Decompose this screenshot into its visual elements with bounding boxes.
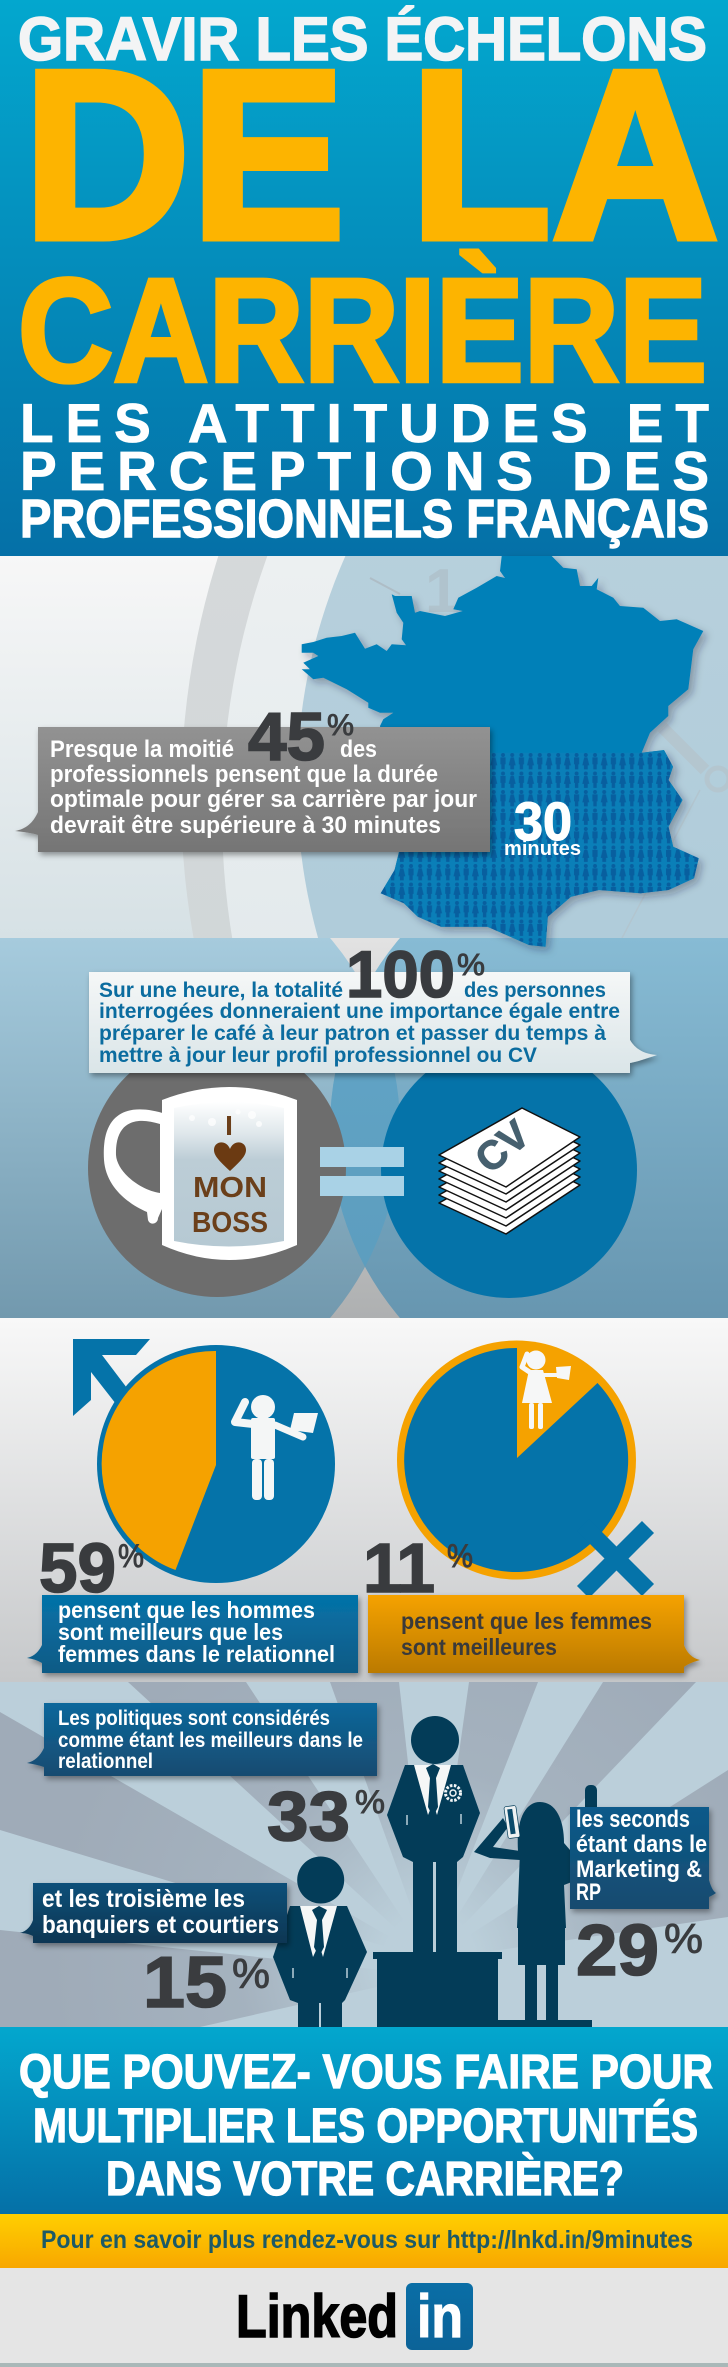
- mug text: boss: BOSS: [192, 1207, 268, 1239]
- logo: LinkedIn: Linked: [236, 2283, 398, 2350]
- number: 15 percent: %: [232, 1950, 270, 1997]
- callout: presque la moitié: [15, 699, 490, 852]
- number: 45 percent: 45: [248, 699, 325, 775]
- callout text: Presque la moitié: [50, 736, 234, 763]
- callout: marketing: étant dans le: [576, 1831, 707, 1858]
- callout: politiques: relationnel: [58, 1750, 153, 1773]
- number: 33 percent: [267, 1777, 385, 1855]
- panel: hourglass background and coffee versus CV: [0, 938, 728, 1318]
- callout text: interrogées donneraient une importance égale entre: [99, 1000, 620, 1023]
- icon: phone: [504, 1805, 520, 1839]
- icon: CV stack: CV: [467, 1112, 538, 1182]
- title line: De la: DE LA: [23, 21, 719, 290]
- callout text: [99, 979, 620, 1067]
- icon: male arrow: [73, 1339, 150, 1416]
- callout: marketing: les seconds: [576, 1806, 690, 1833]
- figure: third place man: [273, 1856, 367, 2027]
- panel: professions: [0, 1682, 728, 2027]
- panel: link banner: Pour en savoir plus rendez-vous sur http://lnkd.in/9minutes: [41, 2226, 693, 2254]
- pie chart: femmes: [397, 1340, 636, 1580]
- subtitle line: perceptions des: PERCEPTIONS DES: [20, 440, 709, 502]
- callout text: devrait être supérieure à 30 minutes: [50, 812, 441, 839]
- icon: mug: [104, 1087, 297, 1260]
- callout: hommes: femmes dans le relationnel: [58, 1641, 335, 1667]
- number: 33 percent: 33: [267, 1777, 350, 1855]
- callout: totalité: [89, 937, 657, 1073]
- title line: Gravir les échelons: GRAVIR LES ÉCHELONS: [18, 5, 707, 73]
- pie chart: hommes: [97, 1345, 335, 1583]
- icon: heart: [214, 1142, 246, 1171]
- figure: pedestal: [373, 1952, 592, 2027]
- callout: banquiers: [20, 1883, 287, 1943]
- callout: marketing: Marketing &: [576, 1856, 702, 1883]
- number: 15 percent: 15: [143, 1943, 227, 2023]
- callout: hommes: sont meilleurs que les: [58, 1619, 283, 1645]
- mug text: mon: MON: [193, 1172, 267, 1204]
- callout: politiques: Les politiques sont considérés: [58, 1707, 330, 1730]
- callout: presque la moitié: %: [327, 709, 354, 742]
- icon: gear badge: [446, 1786, 460, 1800]
- number: 30: 30: [514, 792, 572, 852]
- callout: marketing: RP: [576, 1879, 601, 1906]
- icon: gray circle behind mug: [88, 1039, 346, 1297]
- number: 29 percent: 29: [576, 1911, 659, 1991]
- callout text: préparer le café à leur patron et passer du temps à: [99, 1022, 606, 1045]
- number: 11 percent: [363, 1529, 473, 1607]
- panel: section clock and France map: 1: [425, 557, 459, 626]
- subtitle line: Les attitudes et: LES ATTITUDES ET: [20, 392, 709, 454]
- number: 100 percent: 100: [346, 937, 455, 1011]
- figure: second place woman: [474, 1785, 597, 2022]
- callout: politiques: [27, 1703, 377, 1776]
- callout: hommes: [27, 1595, 358, 1673]
- number: 15 percent: [143, 1943, 270, 2023]
- number: 59 percent: %: [118, 1538, 144, 1574]
- callout: politiques: comme étant les meilleurs dans le: [58, 1729, 363, 1752]
- number: 11 percent: %: [447, 1538, 473, 1574]
- map: France: [302, 556, 703, 947]
- logo: LinkedIn: in: [417, 2283, 463, 2350]
- callout: marketing: [570, 1806, 716, 1909]
- panel: footer with logo: [0, 2268, 728, 2367]
- callout: femmes: pensent que les femmes: [401, 1608, 652, 1634]
- number: 59 percent: 59: [39, 1529, 116, 1607]
- icon: equals sign: [320, 1147, 404, 1196]
- panel: section clock and France map: [0, 556, 728, 954]
- icon: woman with phone and paper: [522, 1350, 571, 1429]
- callout: totalité: %: [457, 947, 485, 982]
- icon: cross: [583, 1525, 648, 1592]
- heading line 3: DANS VOTRE CARRIÈRE?: [106, 2152, 624, 2206]
- callout: hommes: pensent que les hommes: [58, 1597, 315, 1623]
- callout text: des personnes: [464, 979, 606, 1002]
- number: 33 percent: %: [355, 1784, 385, 1820]
- panel: hommes et femmes: [0, 1318, 728, 1682]
- callout text: mettre à jour leur profil professionnel ou CV: [99, 1044, 537, 1067]
- figure: first place man: [387, 1716, 480, 1952]
- callout: femmes: [368, 1595, 700, 1673]
- panel: link banner: [0, 2214, 728, 2268]
- callout text: des: [340, 736, 377, 763]
- number: 29 percent: [576, 1911, 703, 1991]
- callout: femmes: sont meilleures: [401, 1634, 557, 1660]
- panel: call to action: [0, 2027, 728, 2214]
- number: 11 percent: 11: [363, 1529, 435, 1607]
- callout: banquiers: et les troisième les: [42, 1885, 245, 1913]
- callout text: [50, 736, 477, 839]
- icon: man with phone and paper: [235, 1395, 318, 1500]
- callout text: optimale pour gérer sa carrière par jour: [50, 786, 477, 813]
- panel: header: [0, 0, 728, 556]
- callout: banquiers: banquiers et courtiers: [42, 1911, 279, 1939]
- callout text: Sur une heure, la totalité: [99, 979, 343, 1002]
- callout text: professionnels pensent que la durée: [50, 761, 438, 788]
- mug text: I: I: [225, 1110, 233, 1141]
- icon: CV stack: [439, 1108, 580, 1234]
- number: 29 percent: %: [664, 1915, 703, 1962]
- label: minutes: minutes: [504, 838, 581, 860]
- icon: blue circle behind CV: [381, 1042, 637, 1298]
